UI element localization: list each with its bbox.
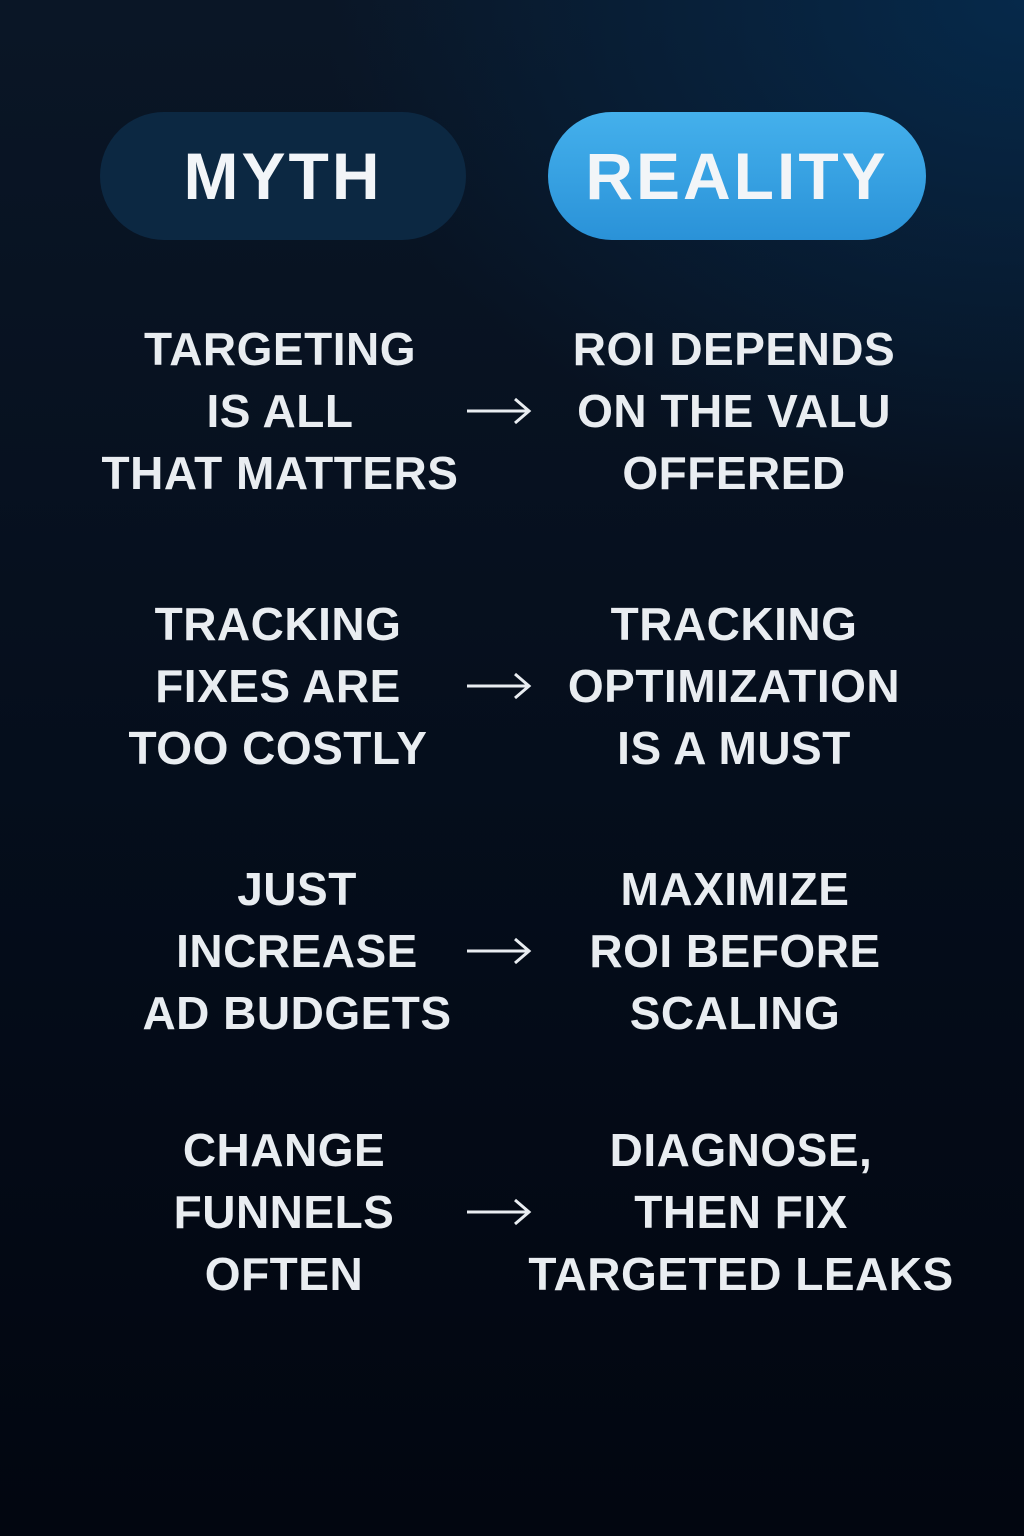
reality 2: TRACKING: [611, 598, 857, 650]
myth 1: TARGETING: [144, 323, 416, 375]
reality 2: [568, 598, 900, 774]
arrow 3: [467, 938, 532, 964]
myth 3: AD BUDGETS: [142, 987, 452, 1039]
arrow 1: [467, 398, 532, 424]
pill: myth: MYTH: [184, 139, 382, 213]
pill: reality: [548, 112, 926, 240]
myth 2: TRACKING: [155, 598, 401, 650]
arrow 4: [467, 1198, 532, 1226]
myth 3: [142, 863, 452, 1039]
reality 3: SCALING: [630, 987, 840, 1039]
reality 1: [573, 323, 895, 499]
pill: myth: [100, 112, 466, 240]
myth 2: FIXES ARE: [155, 660, 401, 712]
myth 3: INCREASE: [176, 925, 418, 977]
reality 4: THEN FIX: [634, 1186, 848, 1238]
myth 1: THAT MATTERS: [102, 447, 458, 499]
reality 1: OFFERED: [622, 447, 846, 499]
myth 3: JUST: [237, 863, 357, 915]
reality 2: OPTIMIZATION: [568, 660, 900, 712]
myth 4: FUNNELS: [174, 1186, 394, 1238]
reality 4: DIAGNOSE,: [610, 1124, 872, 1176]
myth 4: CHANGE: [183, 1124, 385, 1176]
myth 1: IS ALL: [207, 385, 353, 437]
pill: reality: REALITY: [585, 139, 889, 213]
reality 3: [589, 863, 881, 1039]
myth 4: [174, 1124, 394, 1300]
myth 2: TOO COSTLY: [129, 722, 427, 774]
myth 2: [129, 598, 427, 774]
reality 3: ROI BEFORE: [589, 925, 881, 977]
myth 1: [102, 323, 458, 499]
reality 4: TARGETED LEAKS: [528, 1248, 954, 1300]
reality 3: MAXIMIZE: [621, 863, 849, 915]
reality 4: [528, 1124, 954, 1300]
reality 1: ON THE VALU: [577, 385, 891, 437]
myth 4: OFTEN: [205, 1248, 363, 1300]
reality 2: IS A MUST: [617, 722, 851, 774]
reality 1: ROI DEPENDS: [573, 323, 895, 375]
arrow 2: [467, 672, 532, 700]
